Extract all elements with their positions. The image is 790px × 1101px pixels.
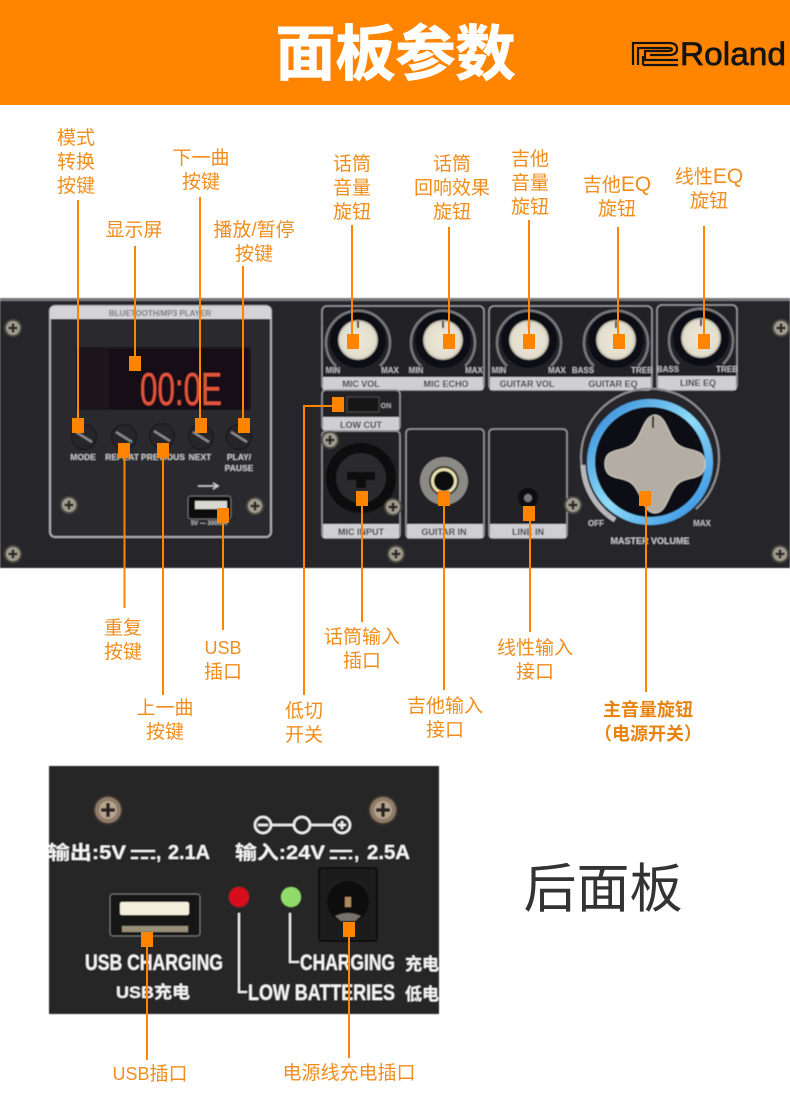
power jack xyxy=(319,868,377,941)
callout: mic volume xyxy=(333,153,371,349)
panel: Bluetooth MP3 player: BLUETOOTH/MP3 PLAYER xyxy=(109,309,211,318)
panel: mic controls: MAX xyxy=(465,366,484,375)
callout: master volume: （电源开关） xyxy=(594,724,702,744)
panel: mic controls: MIN xyxy=(409,366,424,375)
callout: power jack xyxy=(282,922,416,1084)
callout: low cut switch: 低切 xyxy=(285,700,323,722)
panel: low cut switch xyxy=(322,390,400,430)
panel: mic controls: MAX xyxy=(381,366,400,375)
rear panel title: 后面板 xyxy=(524,860,682,919)
callout: mic input xyxy=(324,491,400,672)
callout: master volume: 主音量旋钮 xyxy=(603,699,693,720)
panel: front panel xyxy=(0,298,790,568)
panel: low cut switch: ON xyxy=(381,403,391,410)
LED display xyxy=(76,347,251,415)
low batteries label: 低电 xyxy=(405,985,439,1004)
panel: mic controls: MIC VOL xyxy=(342,379,380,389)
buttons: NEXT xyxy=(189,452,212,462)
callout: mode button: 转换 xyxy=(57,151,95,173)
low batteries label: LOW BATTERIES xyxy=(248,980,395,1005)
callout: master volume xyxy=(594,491,702,744)
master volume knob xyxy=(581,389,719,546)
callout: mic echo xyxy=(414,153,490,349)
callout: mic echo: 旋钮 xyxy=(433,201,471,223)
callout: guitar volume: 吉他 xyxy=(511,148,549,170)
USB port: 5V — 300mA xyxy=(191,521,228,527)
callout: mode button xyxy=(57,127,95,433)
callout: mic input: 插口 xyxy=(343,650,381,672)
LED display: 00:0E xyxy=(140,363,222,415)
callout: rear USB port: USB插口 xyxy=(112,1063,188,1085)
callout: rear USB port xyxy=(112,932,188,1085)
callout: guitar EQ: 吉他EQ xyxy=(583,173,651,196)
panel: line EQ: BASS xyxy=(657,365,680,374)
panel: guitar controls xyxy=(489,306,653,390)
master volume knob: OFF xyxy=(588,519,604,528)
callout: line EQ: 旋钮 xyxy=(690,190,728,212)
panel: mic controls: MIC ECHO xyxy=(424,379,468,389)
callout: mic volume: 音量 xyxy=(333,177,371,199)
buttons: PLAY/ xyxy=(227,452,252,462)
header bar xyxy=(0,0,790,105)
callout: USB: 插口 xyxy=(204,661,242,683)
master volume knob: MASTER VOLUME xyxy=(610,536,690,546)
input rating: , xyxy=(354,843,359,864)
buttons: MODE xyxy=(70,452,96,462)
panel: line in: LINE IN xyxy=(512,527,544,537)
output rating xyxy=(48,841,210,864)
callout: guitar input xyxy=(407,491,483,741)
panel: guitar controls: MIN xyxy=(492,366,507,375)
charging label: CHARGING xyxy=(300,950,395,975)
panel: guitar controls: BASS xyxy=(572,366,595,375)
callout: mic volume: 话筒 xyxy=(333,153,371,175)
panel: line in xyxy=(489,429,582,538)
callout: line input: 线性输入 xyxy=(497,637,573,659)
panel: guitar controls: GUITAR EQ xyxy=(588,379,638,389)
title: 面板参数 xyxy=(276,21,516,88)
Roland logo: Roland xyxy=(680,36,786,72)
panel: mic controls: MIN xyxy=(326,366,341,375)
callout: previous button: 上一曲 xyxy=(136,697,194,719)
callout: power jack: 电源线充电插口 xyxy=(282,1062,416,1084)
callout: guitar input: 接口 xyxy=(426,719,464,741)
panel: Bluetooth MP3 player xyxy=(50,306,271,537)
panel: guitar in: GUITAR IN xyxy=(421,527,467,537)
callout: repeat button: 重复 xyxy=(104,617,142,639)
callout: play pause button: 播放/暂停 xyxy=(213,219,295,241)
master volume knob: MAX xyxy=(693,519,712,528)
panel: guitar in xyxy=(406,429,484,538)
panel: mic controls xyxy=(322,306,484,390)
callout: guitar EQ: 旋钮 xyxy=(598,198,636,220)
green LED xyxy=(281,887,301,907)
callout: mic volume: 旋钮 xyxy=(333,201,371,223)
callout: guitar volume: 旋钮 xyxy=(511,196,549,218)
callout: line EQ xyxy=(675,165,743,349)
output rating: , xyxy=(156,843,161,864)
panel: low cut switch: LOW CUT xyxy=(340,420,382,430)
callout: line input xyxy=(497,506,573,683)
callout: play pause button xyxy=(213,219,295,433)
callout: USB: USB xyxy=(204,638,242,658)
callout: mic input: 话筒输入 xyxy=(324,626,400,648)
callout: USB xyxy=(204,508,242,683)
input rating xyxy=(235,841,410,864)
callout: low cut switch xyxy=(285,397,344,746)
callout: line input: 接口 xyxy=(516,661,554,683)
USB charging Chinese label: USB充电 xyxy=(116,982,190,1002)
buttons: PAUSE xyxy=(225,463,254,473)
callout: next button: 按键 xyxy=(182,171,220,193)
callout: previous button: 按键 xyxy=(146,721,184,743)
buttons: REPEAT xyxy=(105,452,140,462)
callout: repeat button xyxy=(104,443,142,663)
callout: guitar input: 吉他输入 xyxy=(407,695,483,717)
panel: guitar controls: TREB xyxy=(631,366,653,375)
panel: guitar controls: MAX xyxy=(548,366,567,375)
callout: line EQ: 线性EQ xyxy=(675,165,743,188)
callout: low cut switch: 开关 xyxy=(285,724,323,746)
callout: guitar volume xyxy=(511,148,549,349)
buttons xyxy=(70,423,254,473)
polarity symbol xyxy=(255,817,350,833)
USB port xyxy=(188,483,231,527)
USB charging label: USB CHARGING xyxy=(85,950,223,975)
panel: line EQ: LINE EQ xyxy=(680,378,716,388)
callout: guitar EQ xyxy=(583,173,651,349)
callout: repeat button: 按键 xyxy=(104,641,142,663)
panel: rear panel xyxy=(48,766,439,1014)
callout: mic echo: 话筒 xyxy=(433,153,471,175)
callout: next button: 下一曲 xyxy=(172,147,230,169)
panel: line EQ xyxy=(657,305,738,390)
callout: guitar volume: 音量 xyxy=(511,172,549,194)
rear USB port xyxy=(110,894,200,936)
Roland logo xyxy=(633,36,786,72)
panel: mic input xyxy=(321,431,402,538)
callout: mic echo: 回响效果 xyxy=(414,177,490,199)
panel: mic input: MIC INPUT xyxy=(338,527,384,537)
callout: display: 显示屏 xyxy=(105,220,163,241)
output rating: 输出:5V xyxy=(48,841,126,864)
input rating: 输入:24V xyxy=(235,841,325,864)
charging label: 充电 xyxy=(405,954,439,974)
output rating: 2.1A xyxy=(168,842,210,864)
panel: line EQ: TREB xyxy=(716,365,738,374)
callout: play pause button: 按键 xyxy=(235,243,273,265)
callout: display xyxy=(105,220,163,371)
callout: previous button xyxy=(136,443,194,743)
panel: guitar controls: GUITAR VOL xyxy=(500,379,555,389)
input rating: 2.5A xyxy=(367,842,410,864)
red LED xyxy=(229,887,249,907)
callout: next button xyxy=(172,147,230,433)
buttons: PREVIOUS xyxy=(141,452,185,462)
callout: mode button: 按键 xyxy=(57,175,95,197)
callout: mode button: 模式 xyxy=(57,127,95,149)
